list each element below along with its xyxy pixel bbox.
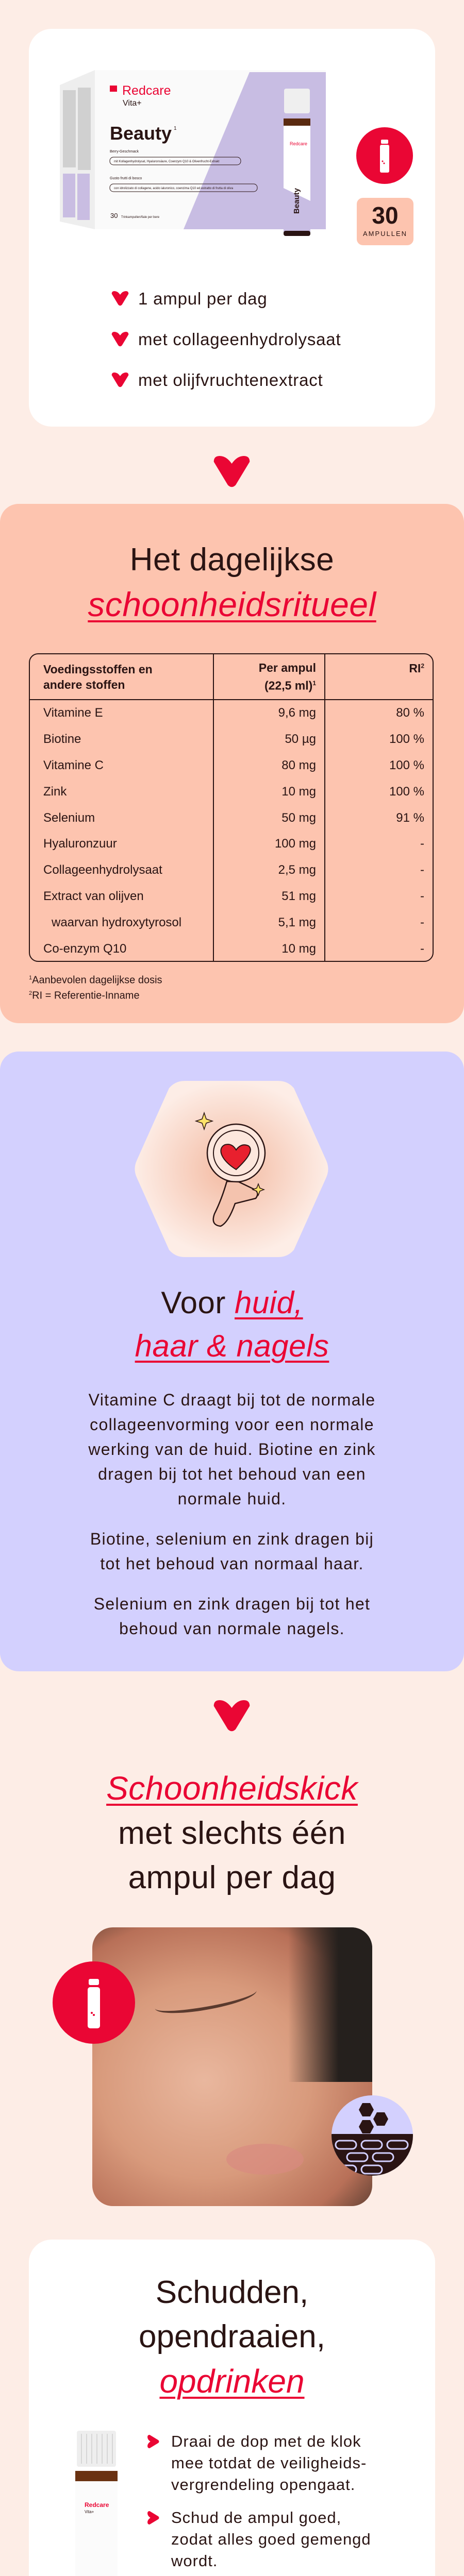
product box image: Redcare bbox=[290, 141, 307, 146]
footnotes bbox=[29, 975, 162, 1001]
bullet list bbox=[111, 289, 341, 389]
table: nutrients: Co-enzym Q10 bbox=[43, 942, 126, 956]
product box image: Gusto frutti di bosco bbox=[110, 177, 142, 180]
table: nutrients: Extract van olijven bbox=[43, 889, 144, 903]
heading: Voor huid, haar & nagels: Voor huid, bbox=[161, 1285, 303, 1320]
product box image: Beauty bbox=[110, 123, 172, 144]
product box image: mit Kollagenhydrolysat, Hyaluronsäure, Coenzym Q10 & Olivenfrucht-Extrakt bbox=[114, 160, 220, 163]
icon: ampoule circle bbox=[356, 127, 413, 184]
table: nutrients: - bbox=[420, 863, 424, 877]
heading: Schoonheidskick bbox=[106, 1770, 359, 1895]
table: nutrients: Selenium bbox=[43, 811, 95, 825]
product box image: con idrolizzato di collagene, acido ialuronico, coenzima Q10 ed estratto di frutta di oliva bbox=[114, 187, 234, 190]
heading: Het dagelijkse schoonheidsritueel: schoonheidsritueel bbox=[88, 585, 376, 623]
table: nutrients: Collageenhydrolysaat bbox=[43, 863, 162, 877]
text: benefits: behoud van normale nagels. bbox=[119, 1619, 345, 1638]
footnotes: 2RI = Referentie-Inname bbox=[29, 990, 140, 1001]
text: benefits: Selenium en zink dragen bij tot het bbox=[94, 1595, 370, 1613]
table: nutrients: - bbox=[420, 942, 424, 956]
bullet: olijfvruchtenextract: met olijfvruchtenextract bbox=[138, 370, 323, 389]
panel: product card bbox=[29, 29, 435, 427]
table: nutrients: 80 % bbox=[396, 706, 424, 720]
step 2 bbox=[147, 2509, 371, 2570]
table: nutrients: RI2 bbox=[409, 662, 424, 675]
icon: red ampoule circle bbox=[53, 1961, 135, 2044]
table: nutrients: 100 % bbox=[389, 785, 424, 799]
step 2: Schud de ampul goed, bbox=[171, 2509, 341, 2527]
table: nutrients: 50 mg bbox=[281, 811, 316, 825]
table: nutrients: 2,5 mg bbox=[278, 863, 316, 877]
product box image: Vita+ bbox=[123, 99, 142, 108]
bullet: collageenhydrolysaat: met collageenhydrolysaat bbox=[138, 330, 341, 348]
text: benefits: werking van de huid. Biotine en zink bbox=[88, 1440, 376, 1459]
table: nutrients: 10 mg bbox=[281, 942, 316, 956]
step 2: zodat alles goed gemengd bbox=[171, 2530, 371, 2548]
list: steps bbox=[147, 2432, 371, 2570]
product box image: Redcare bbox=[122, 83, 171, 98]
heading: Schoonheidskick: met slechts één bbox=[118, 1816, 346, 1851]
text: benefits: dragen bij tot het behoud van een bbox=[98, 1465, 366, 1483]
table: nutrients: 9,6 mg bbox=[278, 706, 316, 720]
table: nutrients: 10 mg bbox=[281, 785, 316, 799]
table: nutrients: - bbox=[420, 837, 424, 851]
product box image bbox=[60, 70, 326, 236]
table: nutrients: waarvan hydroxytyrosol bbox=[52, 916, 181, 929]
product box image: Trinkampullen/fiale per bere bbox=[121, 216, 160, 219]
photo: face bbox=[92, 1927, 372, 2206]
heading: Schoonheidskick: Schoonheidskick bbox=[106, 1770, 358, 1807]
table: nutrients: Per ampul bbox=[259, 661, 316, 674]
step 1: vergrendeling opengaat. bbox=[171, 2476, 355, 2494]
table: nutrients: 100 mg bbox=[275, 837, 316, 851]
table: nutrients: 50 µg bbox=[285, 732, 316, 746]
panel: nutrition bbox=[0, 504, 464, 1023]
product box image: Beauty bbox=[292, 188, 301, 214]
badge: 30 ampullen: AMPULLEN bbox=[363, 230, 407, 238]
icon: hexagon with mirror bbox=[135, 1081, 328, 1257]
heading: Voor huid, haar & nagels bbox=[135, 1285, 329, 1363]
heading: Schudden, opendraaien, opdrinken: opendraaien, bbox=[139, 2319, 325, 2354]
table: nutrients: 100 % bbox=[389, 732, 424, 746]
table: nutrients: (22,5 ml)1 bbox=[264, 679, 316, 692]
image: ampoule: Redcare bbox=[85, 2501, 109, 2509]
table: nutrients: Vitamine C bbox=[43, 758, 104, 772]
image: ampoule: Vita+ bbox=[85, 2510, 94, 2514]
text: benefits: Biotine, selenium en zink dragen bij bbox=[90, 1530, 374, 1548]
table: nutrients: - bbox=[420, 889, 424, 903]
heading: Schudden, opendraaien, opdrinken bbox=[139, 2275, 325, 2400]
table: nutrients: Vitamine E bbox=[43, 706, 103, 720]
arrow: heart down 2 bbox=[213, 1700, 250, 1731]
badge: 30 ampullen bbox=[357, 198, 413, 245]
bullet: 1 ampul per dag: 1 ampul per dag bbox=[138, 289, 267, 308]
panel: huid haar nagels bbox=[0, 1052, 464, 1671]
table: nutrients: 51 mg bbox=[281, 889, 316, 903]
heading: Voor huid, haar & nagels: haar & nagels bbox=[135, 1329, 329, 1363]
table: nutrients: andere stoffen bbox=[43, 678, 125, 691]
product box image: 30 bbox=[110, 212, 118, 219]
table: nutrients: Voedingsstoffen en bbox=[43, 663, 153, 676]
table: nutrients: 80 mg bbox=[281, 758, 316, 772]
heading: Het dagelijkse schoonheidsritueel: Het dagelijkse bbox=[130, 542, 334, 578]
text: benefits: normale huid. bbox=[178, 1489, 286, 1508]
text: benefits: collageenvorming voor een normale bbox=[90, 1415, 374, 1434]
table: nutrients: - bbox=[420, 916, 424, 929]
table: nutrients bbox=[29, 653, 434, 962]
text: benefits: Vitamine C draagt bij tot de normale bbox=[89, 1391, 375, 1409]
footnotes: 1Aanbevolen dagelijkse dosis bbox=[29, 975, 162, 986]
step 1 bbox=[147, 2432, 367, 2494]
heading: Schoonheidskick: ampul per dag bbox=[128, 1860, 336, 1895]
table: nutrients: 100 % bbox=[389, 758, 424, 772]
badge: 30 ampullen: 30 bbox=[372, 202, 399, 229]
heading: Schudden, opendraaien, opdrinken: opdrinken bbox=[159, 2363, 305, 2400]
panel: instructions card bbox=[29, 2240, 435, 2576]
product box image: 1 bbox=[174, 126, 177, 131]
step 1: Draai de dop met de klok bbox=[171, 2432, 361, 2450]
table: nutrients: 91 % bbox=[396, 811, 424, 825]
arrow: heart down 1 bbox=[213, 456, 250, 487]
step 2: wordt. bbox=[171, 2552, 218, 2570]
icon: skin cells circle bbox=[332, 2095, 413, 2176]
heading: Schudden, opendraaien, opdrinken: Schudden, bbox=[156, 2275, 308, 2310]
product box image: Berry-Geschmack bbox=[110, 150, 139, 154]
table: nutrients: 5,1 mg bbox=[278, 916, 316, 929]
table: nutrients: Biotine bbox=[43, 732, 81, 746]
heading: Het dagelijkse schoonheidsritueel bbox=[88, 542, 377, 623]
table: nutrients: Zink bbox=[43, 785, 67, 799]
text: benefits bbox=[88, 1391, 376, 1638]
table: nutrients: Hyaluronzuur bbox=[43, 837, 117, 851]
text: benefits: tot het behoud van normaal haar. bbox=[100, 1554, 364, 1573]
image: ampoule bbox=[75, 2431, 118, 2514]
step 1: mee totdat de veiligheids- bbox=[171, 2454, 367, 2472]
